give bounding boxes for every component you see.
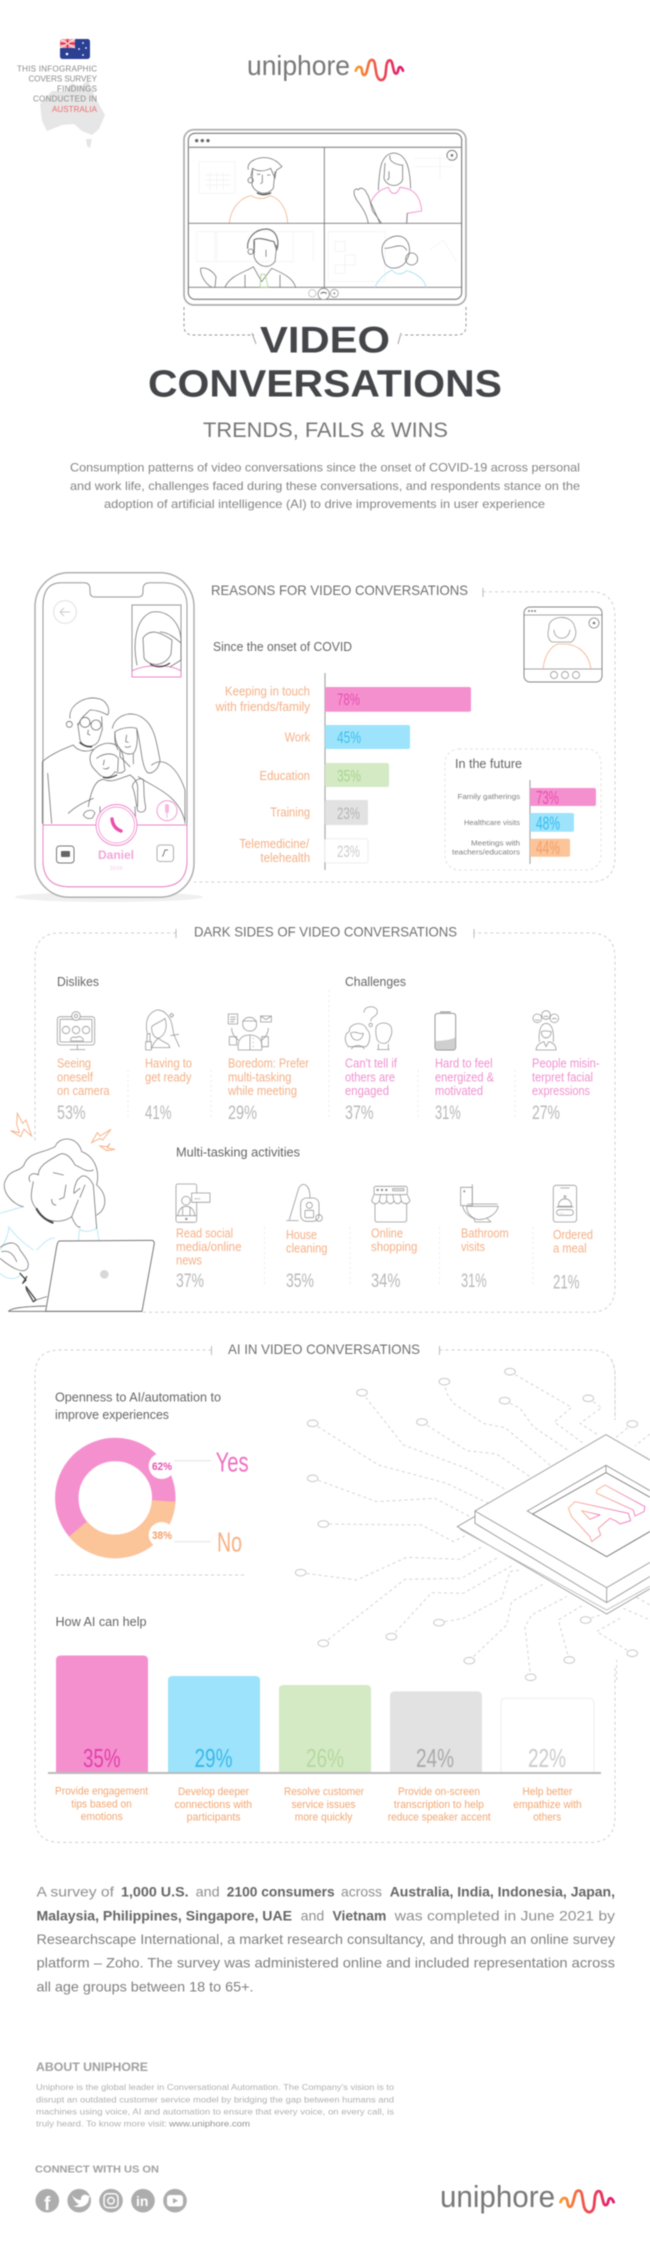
illustration: tired woman at laptop — [0, 1113, 154, 1311]
person: top right woman — [354, 153, 422, 223]
list: multi-tasking activities: cleaning — [286, 1242, 328, 1256]
note text — [17, 64, 98, 114]
inset: in the future: teachers/educators — [452, 848, 520, 857]
about uniphore: disrupt an outdated customer service model by bridging the gap between humans and — [36, 2094, 394, 2104]
list: dislikes: oneself — [57, 1070, 93, 1084]
AI letters — [568, 1485, 645, 1542]
list: dislikes: multi-tasking — [228, 1070, 291, 1084]
subtitle: TRENDS, FAILS & WINS — [203, 419, 448, 442]
person: top left man — [229, 158, 288, 223]
about uniphore: Uniphore is the global leader in Conversational Automation. The Company's vision is to — [36, 2082, 394, 2092]
title: VIDEO — [260, 319, 390, 360]
bar chart: how AI can help: more quickly — [295, 1812, 353, 1824]
survey methodology paragraph: Malaysia, Philippines, Singapore, UAE — [36, 1907, 292, 1923]
list: challenges: Can't tell if — [345, 1057, 397, 1071]
intro paragraph: Consumption patterns of video conversations since the onset of COVID-19 across personal — [70, 461, 580, 475]
note text: THIS INFOGRAPHIC — [17, 64, 97, 73]
list: challenges: terpret facial — [532, 1070, 593, 1084]
call time: 10:04 — [110, 866, 122, 872]
list: challenges: expressions — [532, 1084, 590, 1098]
bar chart: how AI can help: 24% — [416, 1743, 454, 1773]
bar chart: how AI can help: Develop deeper — [178, 1786, 249, 1798]
title: CONVERSATIONS — [148, 364, 502, 406]
bar chart: how AI can help: Resolve customer — [284, 1786, 364, 1798]
list: multi-tasking activities: media/online — [176, 1240, 242, 1254]
donut chart: openness to AI: No — [217, 1527, 242, 1558]
about uniphore: truly heard. To know more visit: — [36, 2119, 167, 2129]
bar chart: since the onset of COVID: telehealth — [260, 851, 310, 865]
bar chart: how AI can help: connections with — [174, 1799, 252, 1811]
heading: challenges: Challenges — [345, 975, 406, 989]
list: dislikes: Boredom: Prefer — [228, 1057, 309, 1071]
bar chart: how AI can help: Help better — [522, 1786, 573, 1798]
list: challenges: motivated — [435, 1084, 483, 1098]
list: multi-tasking activities: Read social — [176, 1226, 233, 1240]
illustration: video call monitor — [184, 130, 466, 305]
intro paragraph: adoption of artificial intelligence (AI) to drive improvements in user experience — [104, 497, 545, 511]
icon: ordered a meal — [553, 1185, 577, 1222]
call panel — [43, 801, 187, 887]
bar chart: how AI can help — [48, 1656, 601, 1824]
icon: instagram — [99, 2189, 123, 2212]
icon: music — [157, 845, 174, 862]
list: dislikes: Having to — [145, 1057, 192, 1071]
list: challenges: engaged — [345, 1084, 389, 1098]
subheading: openness: improve experiences — [55, 1408, 169, 1422]
icon: social media news: NEWS — [194, 1198, 201, 1200]
survey methodology paragraph: platform – Zoho. The survey was administered online and included representation across — [36, 1955, 615, 1971]
map of Australia — [40, 80, 105, 148]
list: dislikes: Seeing — [57, 1057, 91, 1071]
bar chart: how AI can help: 22% — [528, 1743, 566, 1773]
survey methodology paragraph: Researchscape International, a market research consultancy, and through an online survey — [36, 1931, 615, 1947]
icon: twitter — [67, 2189, 91, 2212]
panel: reasons for video conversations — [194, 582, 615, 882]
bar chart: how AI can help: 35% — [83, 1743, 120, 1773]
heading: DARK SIDES OF VIDEO CONVERSATIONS — [194, 924, 457, 940]
country note: Australia — [17, 39, 105, 148]
bar chart: how AI can help: empathize with — [513, 1799, 582, 1811]
about uniphore: www.uniphore.com — [168, 2119, 250, 2129]
list: dislikes: 53% — [57, 1103, 86, 1124]
title — [148, 319, 502, 406]
bar chart: since the onset of COVID: Training — [270, 806, 310, 820]
survey methodology paragraph: and — [301, 1907, 324, 1923]
logo: uniphore top: uniphore — [247, 50, 350, 81]
list: multi-tasking activities: Ordered — [553, 1228, 593, 1242]
circuit traces — [301, 1360, 650, 1680]
illustration: phone with family call — [15, 573, 203, 902]
heading: multi-tasking activities: Multi-tasking activities — [176, 1146, 300, 1160]
caller name: Daniel — [98, 848, 134, 862]
survey methodology paragraph: 1,000 U.S. — [121, 1884, 189, 1900]
icon: having to get ready — [146, 1010, 179, 1050]
bar chart: how AI can help: emotions — [81, 1811, 123, 1823]
inset: in the future: 73% — [536, 788, 559, 808]
heading: AI IN VIDEO CONVERSATIONS — [228, 1341, 420, 1357]
list: dislikes: on camera — [57, 1084, 110, 1098]
note text: COVERS SURVEY — [28, 74, 98, 83]
icon: facebook — [36, 2189, 59, 2215]
circuit nodes — [295, 1368, 638, 1681]
about uniphore — [36, 2060, 394, 2129]
bar chart: how AI can help: tips based on — [71, 1798, 132, 1810]
bar chart: how AI can help: transcription to help — [394, 1799, 484, 1811]
chip body — [457, 1435, 650, 1614]
inset: in the future: Healthcare visits — [464, 818, 520, 827]
bar chart: how AI can help: others — [533, 1812, 562, 1824]
list: multi-tasking activities: 34% — [371, 1271, 400, 1292]
panel: dark sides of video conversations — [0, 924, 615, 1312]
logo: uniphore bottom — [440, 2179, 614, 2214]
icon: chat — [56, 846, 74, 863]
icon: Australian flag — [60, 39, 90, 59]
icon: logo wave — [560, 2191, 614, 2212]
list: challenges: others are — [345, 1070, 395, 1084]
icon: social media news — [176, 1184, 210, 1222]
connect with us — [35, 2164, 187, 2215]
panel: AI in video conversations — [35, 1341, 650, 1842]
list: challenges: 31% — [435, 1103, 461, 1124]
icon: linkedin — [131, 2189, 155, 2212]
donut chart: openness to AI: 62% — [152, 1461, 172, 1473]
person: bottom right woman — [375, 236, 426, 287]
note text: CONDUCTED IN — [33, 95, 97, 104]
list: multi-tasking activities: 21% — [553, 1273, 580, 1294]
bar chart: how AI can help: Provide on-screen — [398, 1786, 480, 1798]
connect with us: CONNECT WITH US ON — [35, 2164, 159, 2176]
hair and face — [4, 1139, 105, 1228]
icon: logo wave — [356, 60, 403, 80]
list: dislikes — [57, 1057, 309, 1124]
lightning bolts — [11, 1113, 115, 1151]
list: dislikes: 41% — [145, 1103, 172, 1124]
icon: facebook: f — [44, 2194, 51, 2215]
survey methodology paragraph: Vietnam — [332, 1907, 386, 1923]
heading: REASONS FOR VIDEO CONVERSATIONS — [211, 582, 468, 598]
icon: call button — [96, 804, 137, 846]
inset: in the future: In the future — [455, 757, 522, 771]
bar chart: since the onset of COVID: with friends/family — [215, 700, 311, 714]
list: multi-tasking activities: Bathroom — [461, 1226, 509, 1240]
bar chart: since the onset of COVID: Keeping in touch — [225, 685, 310, 699]
icon: seeing oneself on camera — [57, 1012, 95, 1050]
subheading: openness — [55, 1391, 221, 1422]
illustration: AI chip with circuit lines — [295, 1360, 650, 1681]
illustration: small video window — [524, 607, 602, 682]
icon: youtube — [163, 2189, 187, 2212]
list: challenges — [345, 1057, 600, 1124]
about uniphore: ABOUT UNIPHORE — [36, 2060, 148, 2074]
donut chart: openness to AI — [67, 1447, 249, 1558]
icon: microphone — [157, 801, 177, 821]
survey methodology paragraph: and — [196, 1884, 220, 1900]
bar chart: how AI can help: 26% — [306, 1743, 344, 1773]
survey methodology paragraph: Australia, India, Indonesia, Japan, — [390, 1884, 615, 1900]
bar chart: how AI can help: Provide engagement — [55, 1786, 148, 1798]
intro paragraph — [70, 461, 580, 511]
icon: vacuum cleaner — [287, 1184, 322, 1221]
survey methodology paragraph: 2100 consumers — [227, 1884, 335, 1900]
person: bottom left man in suit — [201, 229, 296, 287]
icon: people misinterpret facial expressions — [533, 1011, 559, 1050]
note text: AUSTRALIA — [52, 105, 98, 114]
list: dislikes: while meeting — [227, 1084, 297, 1098]
bar chart: since the onset of COVID: 23% — [337, 842, 360, 861]
subheading: since the onset of COVID: Since the onset of COVID — [213, 640, 352, 654]
survey methodology paragraph: across — [341, 1884, 382, 1900]
bar chart: how AI can help: participants — [187, 1812, 241, 1824]
bar chart: since the onset of COVID: 23% — [337, 804, 360, 823]
icon: online shopping — [372, 1186, 410, 1222]
icon: bathroom — [461, 1185, 498, 1222]
laptop — [46, 1240, 154, 1311]
blue clothing — [0, 1207, 99, 1279]
logo: uniphore bottom: uniphore — [440, 2179, 555, 2214]
list: multi-tasking activities: Online — [371, 1226, 403, 1240]
bar chart: how AI can help: 29% — [194, 1743, 232, 1773]
list: challenges: People misin- — [532, 1057, 600, 1071]
intro paragraph: and work life, challenges faced during these conversations, and respondents stance on the — [70, 479, 580, 493]
bar chart: since the onset of COVID: Work — [285, 731, 311, 745]
inset: in the future: Meetings with — [471, 839, 520, 848]
icon: linkedin: in — [136, 2193, 148, 2209]
list: multi-tasking activities: news — [176, 1254, 202, 1268]
list: challenges: 37% — [345, 1103, 374, 1124]
bar chart: since the onset of COVID: 35% — [337, 767, 361, 786]
dividers — [128, 990, 533, 1287]
survey methodology paragraph: was completed in June 2021 by — [394, 1907, 615, 1923]
bar chart: since the onset of COVID — [215, 673, 471, 870]
bar chart: since the onset of COVID: 45% — [337, 728, 361, 747]
survey methodology paragraph — [36, 1884, 615, 1994]
logo: uniphore top — [247, 50, 403, 81]
inset: in the future: Family gatherings — [458, 792, 520, 801]
donut chart: openness to AI: Yes — [216, 1447, 249, 1478]
list: dislikes: get ready — [145, 1070, 192, 1084]
list: multi-tasking activities: a meal — [553, 1242, 587, 1256]
list: dislikes: 29% — [228, 1103, 257, 1124]
heading: dislikes: Dislikes — [57, 975, 99, 989]
family: man, woman and child — [42, 698, 185, 823]
small self-view — [132, 605, 181, 677]
icon: ordered a meal: ORDER — [559, 1213, 564, 1215]
subheading: openness: Openness to AI/automation to — [55, 1391, 221, 1405]
bar chart: since the onset of COVID: Telemedicine/ — [239, 837, 310, 851]
about uniphore: machines using voice, AI and automation to ensure that every voice, on every call, is — [36, 2106, 394, 2116]
bar chart: how AI can help: service issues — [292, 1799, 356, 1811]
inset: in the future: 44% — [536, 838, 560, 858]
donut chart: openness to AI: 38% — [152, 1530, 172, 1542]
survey methodology paragraph: all age groups between 18 to 65+. — [36, 1978, 253, 1994]
faint room backgrounds — [197, 155, 457, 282]
list: multi-tasking activities: 31% — [461, 1271, 487, 1292]
list: multi-tasking activities: 37% — [176, 1271, 204, 1292]
list: challenges: 27% — [532, 1103, 560, 1124]
list: challenges: Hard to feel — [435, 1057, 493, 1071]
bar chart: since the onset of COVID: 78% — [337, 690, 360, 709]
list: multi-tasking activities — [176, 1226, 593, 1294]
note text: FINDINGS — [57, 85, 97, 94]
list: multi-tasking activities: 35% — [286, 1271, 314, 1292]
icon: can't tell if others are engaged — [345, 1007, 392, 1050]
bracket around title — [184, 307, 466, 344]
subheading: how AI can help: How AI can help — [56, 1615, 147, 1629]
inset: in the future — [445, 749, 601, 870]
icon: battery low — [435, 1012, 456, 1050]
bar chart: how AI can help: reduce speaker accent — [388, 1812, 491, 1824]
list: challenges: energized & — [435, 1070, 495, 1084]
survey methodology paragraph: A survey of — [36, 1884, 114, 1900]
list: multi-tasking activities: visits — [461, 1240, 485, 1254]
lower hand and glasses — [0, 1243, 47, 1302]
icon: boredom, multi-tasking — [228, 1014, 271, 1050]
list: multi-tasking activities: House — [286, 1228, 317, 1242]
inset: in the future: 48% — [536, 813, 560, 833]
back button — [54, 601, 76, 623]
list: multi-tasking activities: shopping — [371, 1240, 417, 1254]
bar chart: since the onset of COVID: Education — [260, 769, 310, 783]
